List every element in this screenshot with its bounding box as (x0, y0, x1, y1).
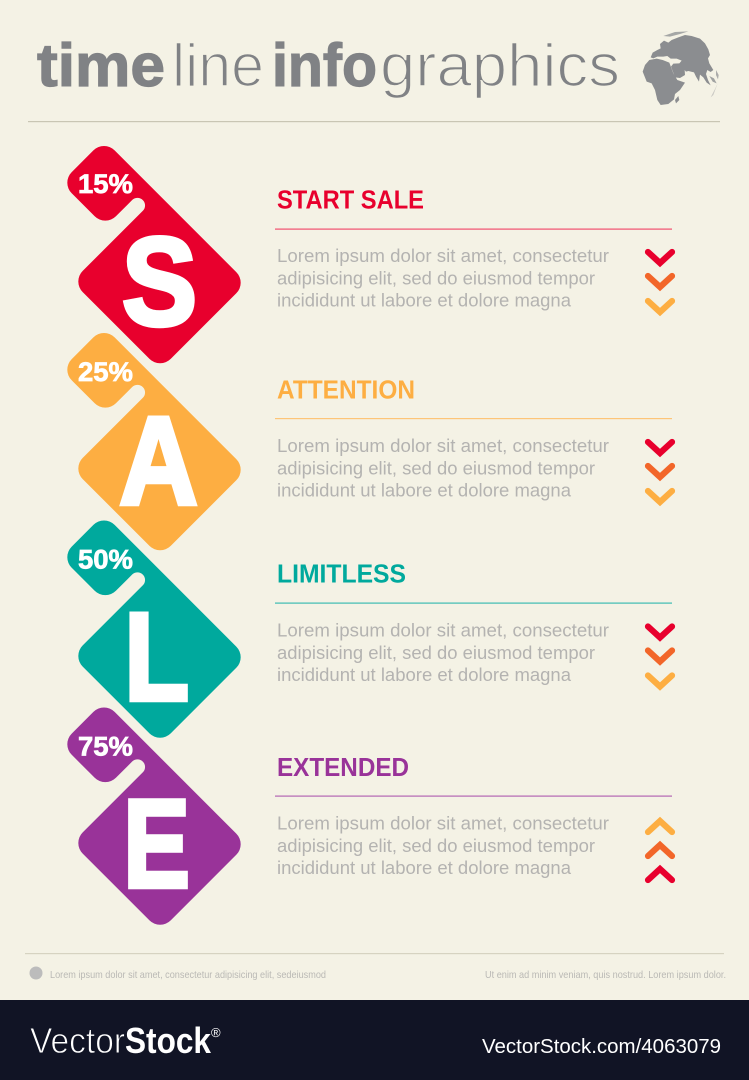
body text: incididunt ut labore et dolore magna (277, 664, 572, 685)
heading: start sale: START SALE (277, 186, 424, 214)
percent: 75%: 75% (78, 732, 133, 762)
icon: down chevrons (648, 626, 672, 686)
icon: grey dot (30, 966, 42, 980)
icon: down chevrons (648, 442, 672, 502)
icon: down chevrons (648, 252, 672, 312)
watermark band (0, 1000, 749, 1080)
letter: S: S (122, 213, 197, 352)
body text: Lorem ipsum dolor sit amet, consectetur (277, 435, 609, 456)
icon: up chevrons (648, 821, 672, 880)
footer divider (25, 953, 724, 954)
body text (277, 812, 609, 878)
panel: start sale (275, 186, 672, 312)
heading: extended: EXTENDED (277, 754, 409, 782)
letter: A: A (119, 391, 198, 531)
percent: 50%: 50% (78, 544, 133, 574)
logo: VectorStock: Vector (30, 1020, 125, 1061)
title (37, 32, 620, 99)
letter: E: E (123, 774, 190, 914)
panel: attention (275, 376, 672, 502)
logo: VectorStock: ® (211, 1025, 221, 1040)
logo: VectorStock: Stock (125, 1020, 212, 1061)
percent: 25%: 25% (78, 357, 133, 387)
body text (277, 245, 609, 310)
body text: adipisicing elit, sed do eiusmod tempor (277, 642, 595, 663)
body text: adipisicing elit, sed do eiusmod tempor (277, 458, 595, 478)
body text: incididunt ut labore et dolore magna (277, 857, 572, 878)
body text: adipisicing elit, sed do eiusmod tempor (277, 268, 595, 288)
icon: globe (643, 31, 719, 105)
header divider (28, 121, 720, 122)
heading: attention: ATTENTION (277, 376, 415, 404)
body text: Lorem ipsum dolor sit amet, consectetur (277, 245, 609, 266)
footer note left: Lorem ipsum dolor sit amet, consectetur adipisicing elit, sedeiusmod (50, 969, 326, 981)
heading: limitless: LIMITLESS (277, 560, 406, 588)
title: info (272, 32, 377, 99)
panel: extended (275, 754, 672, 880)
body text (277, 435, 609, 500)
title: time (37, 32, 165, 99)
panel: limitless (275, 560, 672, 686)
body text: incididunt ut labore et dolore magna (277, 290, 572, 310)
panel: A tile (67, 333, 241, 550)
panel: L tile (67, 521, 241, 738)
footer note left (30, 966, 326, 981)
body text (277, 620, 609, 685)
image id: VectorStock.com/4063079 (482, 1036, 721, 1058)
body text: Lorem ipsum dolor sit amet, consectetur (277, 812, 609, 834)
title: line (172, 32, 264, 99)
body text: incididunt ut labore et dolore magna (277, 480, 572, 500)
percent: 15%: 15% (78, 169, 133, 199)
logo: VectorStock (30, 1020, 221, 1061)
letter: L: L (124, 587, 189, 727)
panel: S tile (67, 146, 241, 363)
panel: E tile (67, 708, 241, 925)
title: graphics (380, 32, 620, 99)
body text: adipisicing elit, sed do eiusmod tempor (277, 835, 595, 856)
body text: Lorem ipsum dolor sit amet, consectetur (277, 620, 609, 640)
